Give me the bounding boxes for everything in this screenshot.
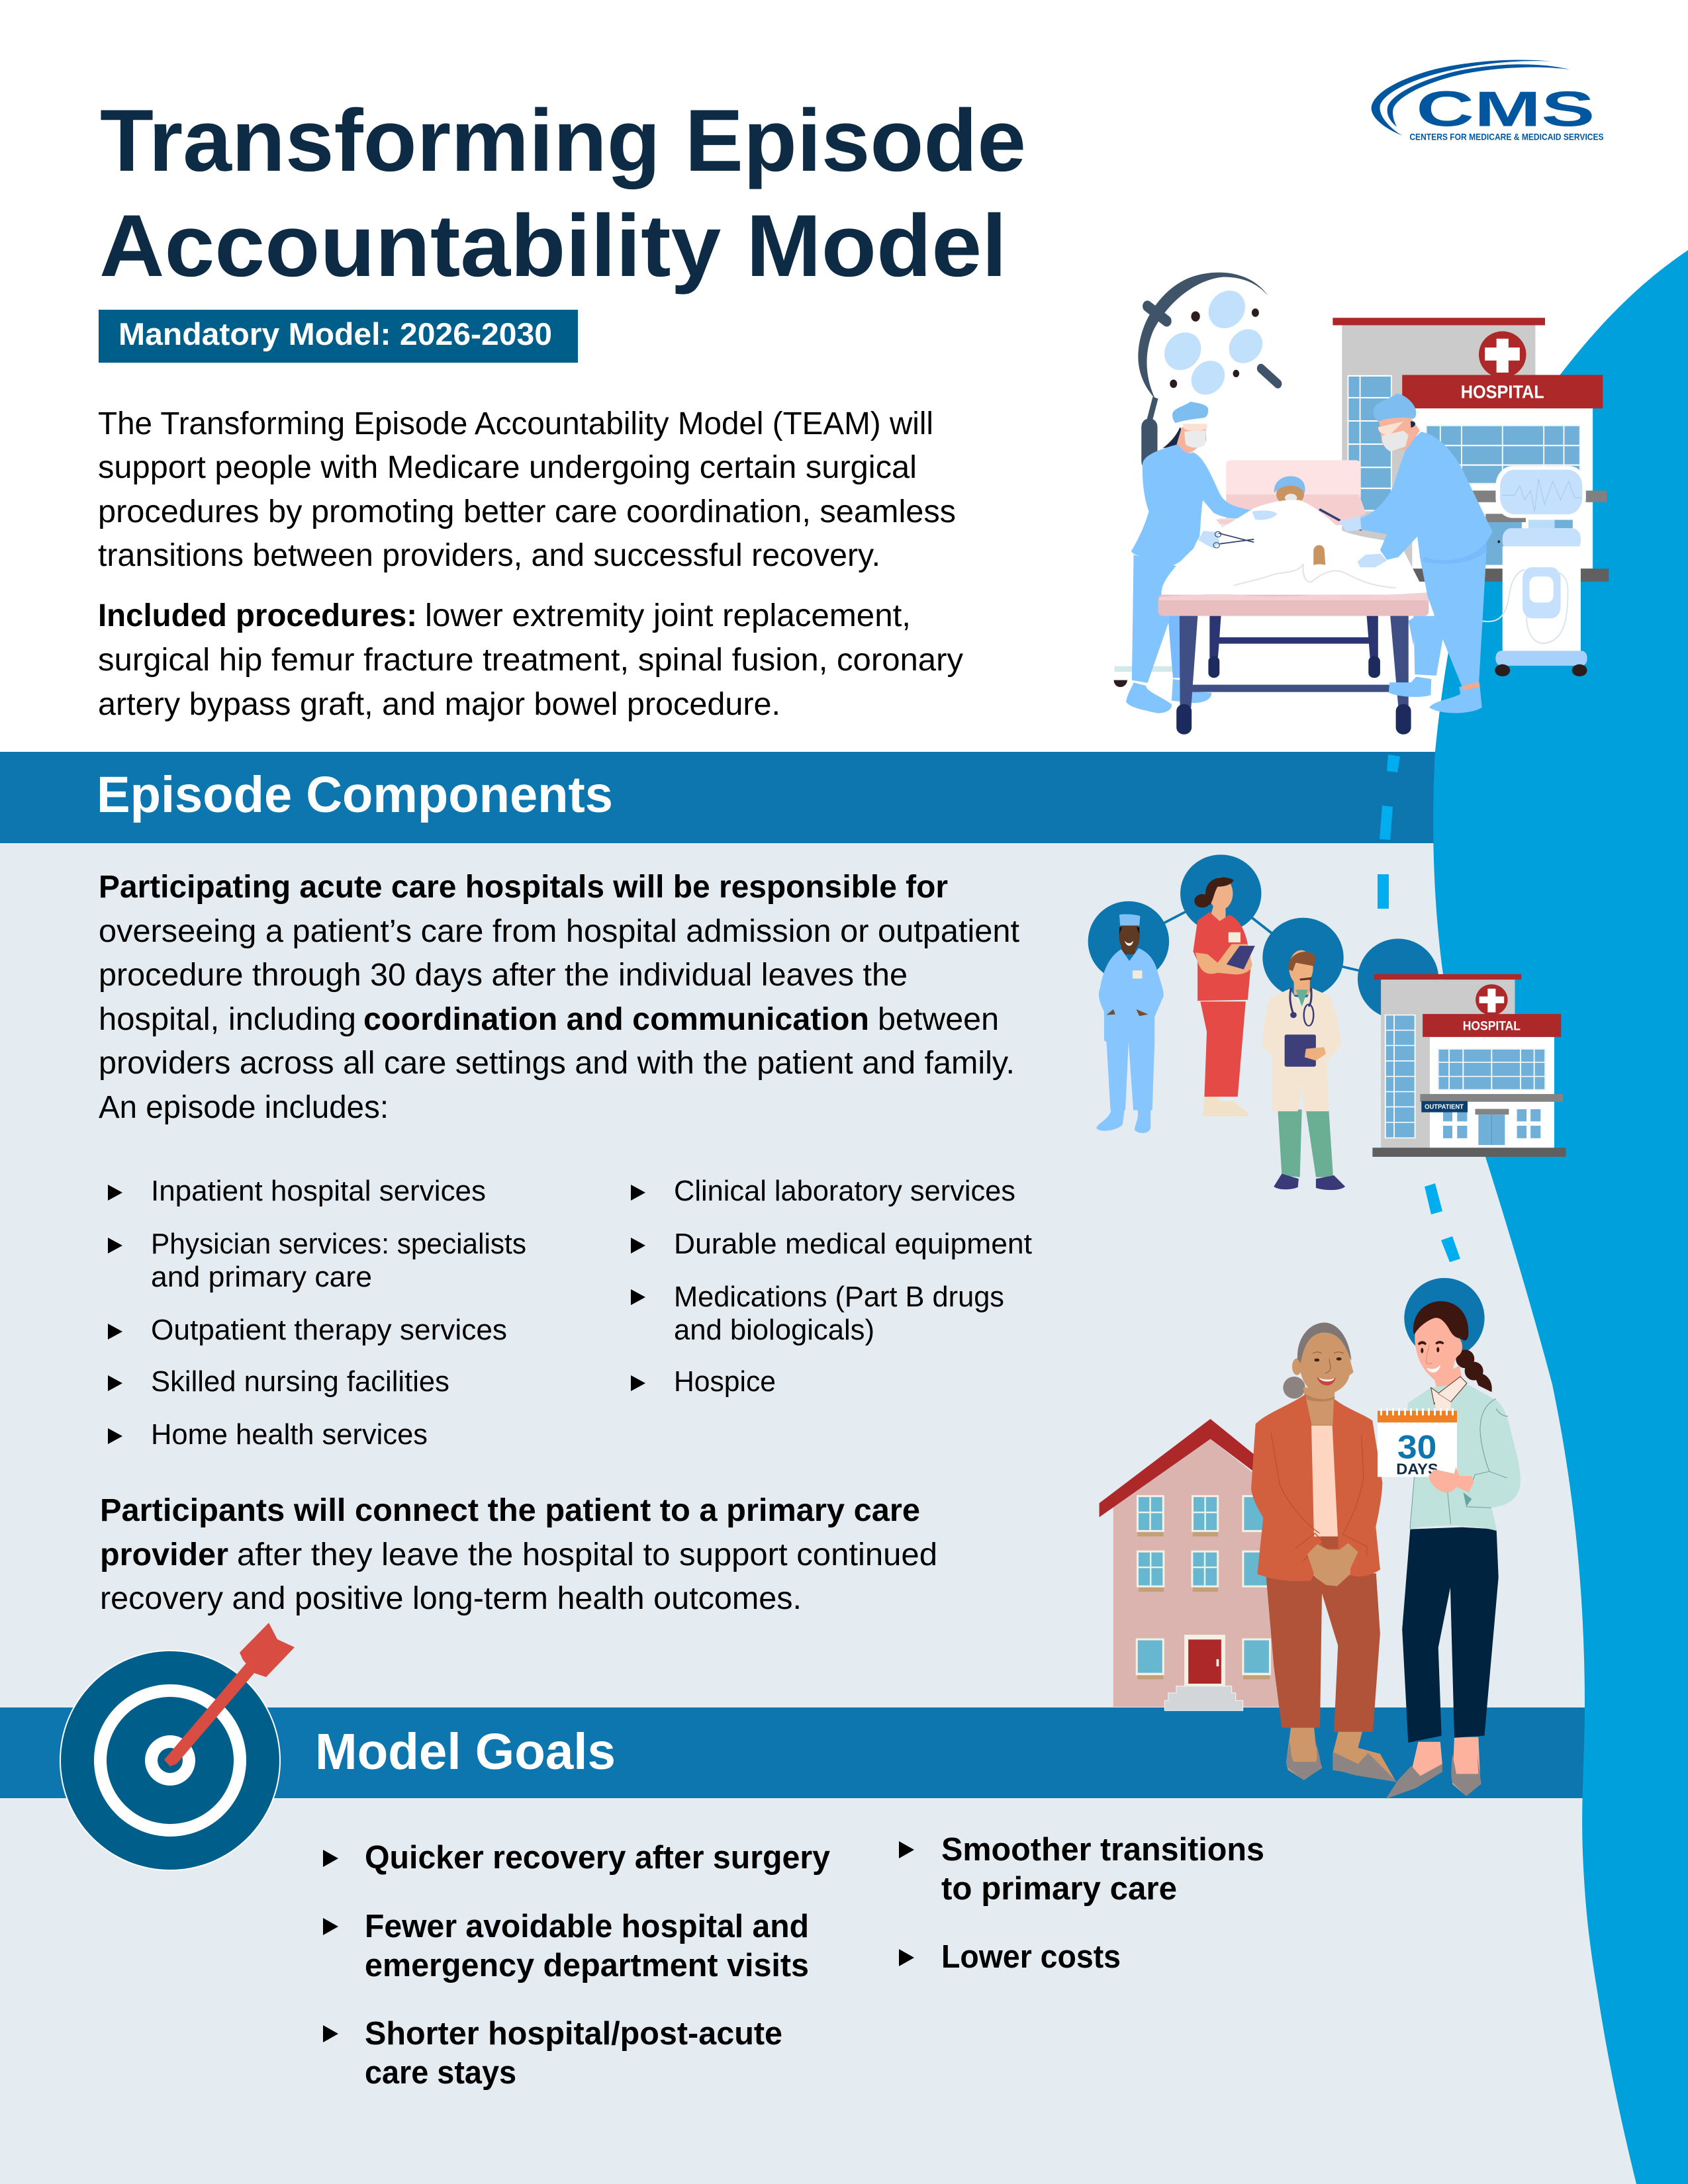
list: episode services left: Outpatient therapy services	[151, 1314, 507, 1346]
text block: episode responsibility: providers across all care settings and with the patient and family.	[99, 1046, 1015, 1081]
text block: episode responsibility: coordination and communication	[363, 1002, 869, 1037]
text block: primary care connection: Participants will connect the patient to a primary care	[100, 1493, 920, 1528]
list: model goals left: care stays	[365, 2055, 516, 2091]
list: model goals left: Quicker recovery after surgery	[365, 1840, 830, 1876]
text block: primary care connection: recovery and positive long-term health outcomes.	[100, 1581, 802, 1616]
text block: episode responsibility: procedure through 30 days after the individual leaves the	[99, 958, 908, 993]
logo: CMS	[1372, 60, 1604, 142]
title	[99, 92, 1026, 295]
title: Transforming Episode	[100, 92, 1026, 190]
illustration: house and lower bodies	[1100, 1419, 1499, 1799]
text block: primary care connection	[100, 1493, 937, 1616]
path: dashed route	[1378, 754, 1460, 1262]
figure: caregiver	[1378, 1278, 1521, 1531]
text block: episode responsibility: Participating acute care hospitals will be responsible for	[99, 870, 948, 905]
text block: primary care connection: provider	[100, 1537, 228, 1572]
band: model goals	[0, 1707, 1602, 1798]
blue curved side panel	[1433, 250, 1688, 2184]
list: episode services left	[108, 1175, 526, 1451]
illustration: hospital building: HOSPITAL	[1461, 381, 1544, 402]
text block: included procedures: Included procedures:	[98, 598, 417, 633]
list: episode services left: Physician services: specialists	[151, 1228, 526, 1260]
list: episode services left: Skilled nursing facilities	[151, 1365, 449, 1398]
list: model goals left: Shorter hospital/post-acute	[365, 2016, 782, 2052]
logo: CMS: CMS	[1416, 81, 1595, 136]
text block: episode responsibility	[99, 870, 1019, 1125]
illustration: people upper bodies	[1251, 1278, 1521, 1586]
figure: nurse in red scrubs	[1193, 878, 1255, 1116]
text block: primary care connection: after they leave the hospital to support continued	[237, 1537, 937, 1572]
illustration: outpatient hospital	[1372, 974, 1566, 1157]
panel: light content background	[0, 842, 1688, 2184]
connector lines and circles	[1088, 854, 1438, 1019]
icon: surgical lamp	[1113, 273, 1278, 687]
illustration: outpatient hospital: OUTPATIENT	[1425, 1103, 1464, 1111]
illustration: care team	[1088, 854, 1566, 1190]
illustration: lamp, hospital and monitor	[1113, 273, 1609, 687]
list: episode services right: Clinical laboratory services	[674, 1175, 1015, 1207]
list: model goals right: Lower costs	[941, 1939, 1121, 1975]
text block: included procedures	[98, 598, 963, 722]
text block: episode responsibility: overseeing a patient’s care from hospital admission or outpatient	[99, 914, 1019, 949]
band: episode components	[0, 752, 1456, 843]
text block: intro	[98, 406, 956, 573]
table head section with patient	[1226, 460, 1366, 525]
figure: doctor	[1262, 950, 1345, 1190]
illustration: hospital building	[1333, 318, 1609, 582]
list: episode services right: Hospice	[674, 1365, 776, 1398]
calendar: 30 days	[1378, 1411, 1457, 1477]
list: model goals right: to primary care	[941, 1871, 1177, 1907]
text block: episode responsibility: between	[878, 1002, 999, 1037]
text block: intro: The Transforming Episode Accountability Model (TEAM) will	[98, 406, 933, 441]
section heading: episode components: Episode Components	[97, 766, 613, 823]
figure: left surgeon	[1126, 402, 1252, 713]
list: episode services left: Inpatient hospital services	[151, 1175, 486, 1207]
title: Accountability Model	[99, 197, 1007, 295]
legs: patient	[1266, 1573, 1397, 1782]
calendar: 30 days: DAYS	[1396, 1460, 1438, 1477]
list: model goals left: emergency department visits	[365, 1948, 809, 1983]
list: model goals right	[899, 1832, 1264, 1975]
list: model goals left	[323, 1840, 830, 2091]
badge: mandatory model dates	[99, 310, 578, 363]
illustration: house	[1100, 1419, 1284, 1711]
list: episode services left: and primary care	[151, 1261, 372, 1293]
list: episode services right: Medications (Part B drugs	[674, 1281, 1004, 1313]
logo: CMS: CENTERS FOR MEDICARE & MEDICAID SERVICES	[1409, 132, 1604, 142]
list: model goals left: Fewer avoidable hospital and	[365, 1909, 809, 1944]
illustration: outpatient hospital: HOSPITAL	[1463, 1019, 1521, 1033]
text block: intro: procedures by promoting better care coordination, seamless	[98, 494, 956, 529]
illustration: surgery scene	[1126, 393, 1493, 735]
badge: mandatory model dates: Mandatory Model: 2026-2030	[118, 316, 552, 351]
text block: episode responsibility: An episode includes:	[99, 1090, 389, 1125]
list: episode services right: and biologicals)	[674, 1314, 874, 1346]
operating table	[1158, 500, 1429, 735]
text block: episode responsibility: hospital, including	[99, 1002, 356, 1037]
figure: patient	[1251, 1322, 1382, 1586]
icon: target with arrow	[60, 1623, 295, 1871]
list: episode services right: Durable medical equipment	[674, 1228, 1032, 1260]
text block: intro: support people with Medicare undergoing certain surgical	[98, 450, 917, 485]
text block: intro: transitions between providers, and successful recovery.	[98, 538, 880, 573]
text block: included procedures: artery bypass graft, and major bowel procedure.	[98, 687, 780, 722]
figure: nurse in blue scrubs	[1096, 914, 1164, 1133]
figure: right surgeon	[1339, 393, 1493, 713]
list: episode services left: Home health services	[151, 1418, 428, 1451]
text block: included procedures: lower extremity joint replacement,	[425, 598, 911, 633]
section heading: model goals: Model Goals	[315, 1723, 616, 1780]
legs: caregiver	[1386, 1527, 1499, 1799]
calendar: 30 days: 30	[1397, 1428, 1436, 1465]
surgeon hands and instruments	[1198, 509, 1362, 549]
list: episode services right	[631, 1175, 1032, 1398]
list: model goals right: Smoother transitions	[941, 1832, 1264, 1868]
illustration: patient monitor	[1476, 466, 1587, 676]
text block: included procedures: surgical hip femur fracture treatment, spinal fusion, coronary	[98, 643, 963, 678]
